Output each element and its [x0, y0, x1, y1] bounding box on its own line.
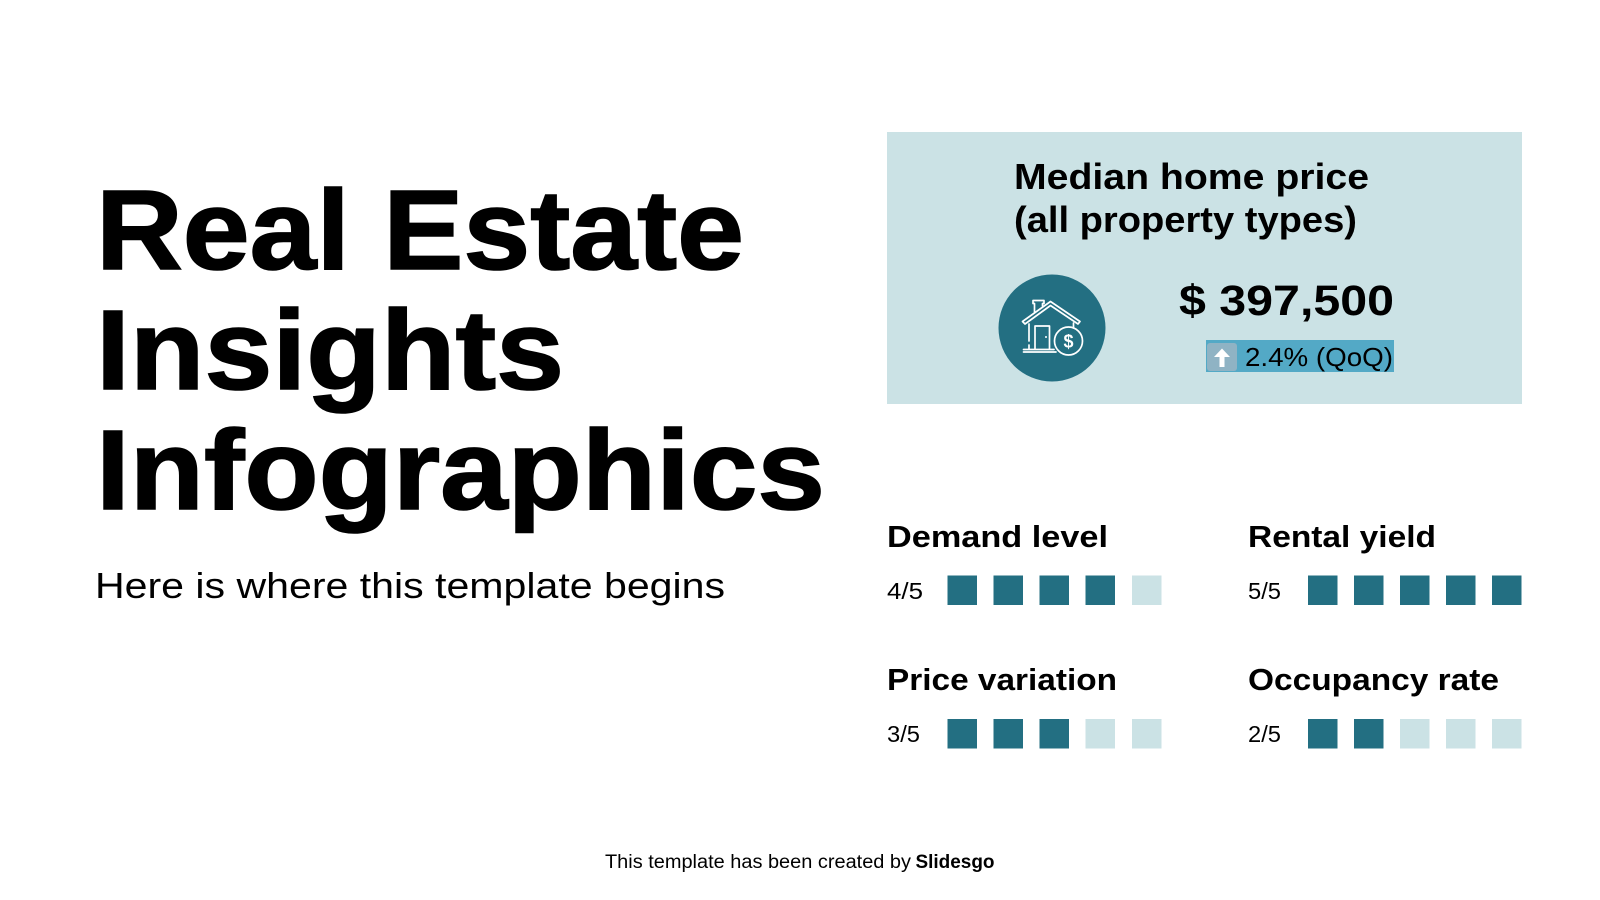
metric: demand level: Demand level — [887, 519, 1108, 554]
icon: house with dollar coin — [998, 274, 1106, 382]
panel heading — [1014, 156, 1369, 240]
metric: rental yield: 5/5 — [1248, 578, 1281, 604]
metric: price variation — [887, 662, 1162, 748]
title: Real Estate — [96, 167, 744, 293]
metric: rental yield: Rental yield — [1248, 519, 1436, 554]
panel heading: Median home price — [1014, 156, 1369, 197]
icon: house with dollar coin: $ — [1063, 332, 1074, 352]
metric: rental yield — [1248, 519, 1522, 605]
icon: up arrow — [1207, 343, 1237, 371]
subtitle: Here is where this template begins — [95, 565, 725, 606]
panel: median home price — [887, 132, 1522, 404]
metric: occupancy rate: Occupancy rate — [1248, 662, 1499, 697]
metric: demand level: 4/5 — [887, 578, 923, 604]
metric: occupancy rate: 2/5 — [1248, 721, 1281, 747]
footer credit: Slidesgo — [916, 852, 994, 873]
change badge — [1206, 340, 1394, 372]
metric: occupancy rate — [1248, 662, 1522, 748]
metric: price variation: 3/5 — [887, 721, 920, 747]
price value: $ 397,500 — [1179, 277, 1394, 325]
title — [96, 167, 825, 533]
footer credit: This template has been created by — [605, 852, 912, 873]
panel heading: (all property types) — [1014, 199, 1357, 240]
metric: demand level — [887, 519, 1162, 605]
change badge: 2.4% (QoQ) — [1245, 342, 1393, 372]
title: Insights — [96, 287, 564, 413]
metric: price variation: Price variation — [887, 662, 1117, 697]
title: Infographics — [96, 407, 825, 533]
